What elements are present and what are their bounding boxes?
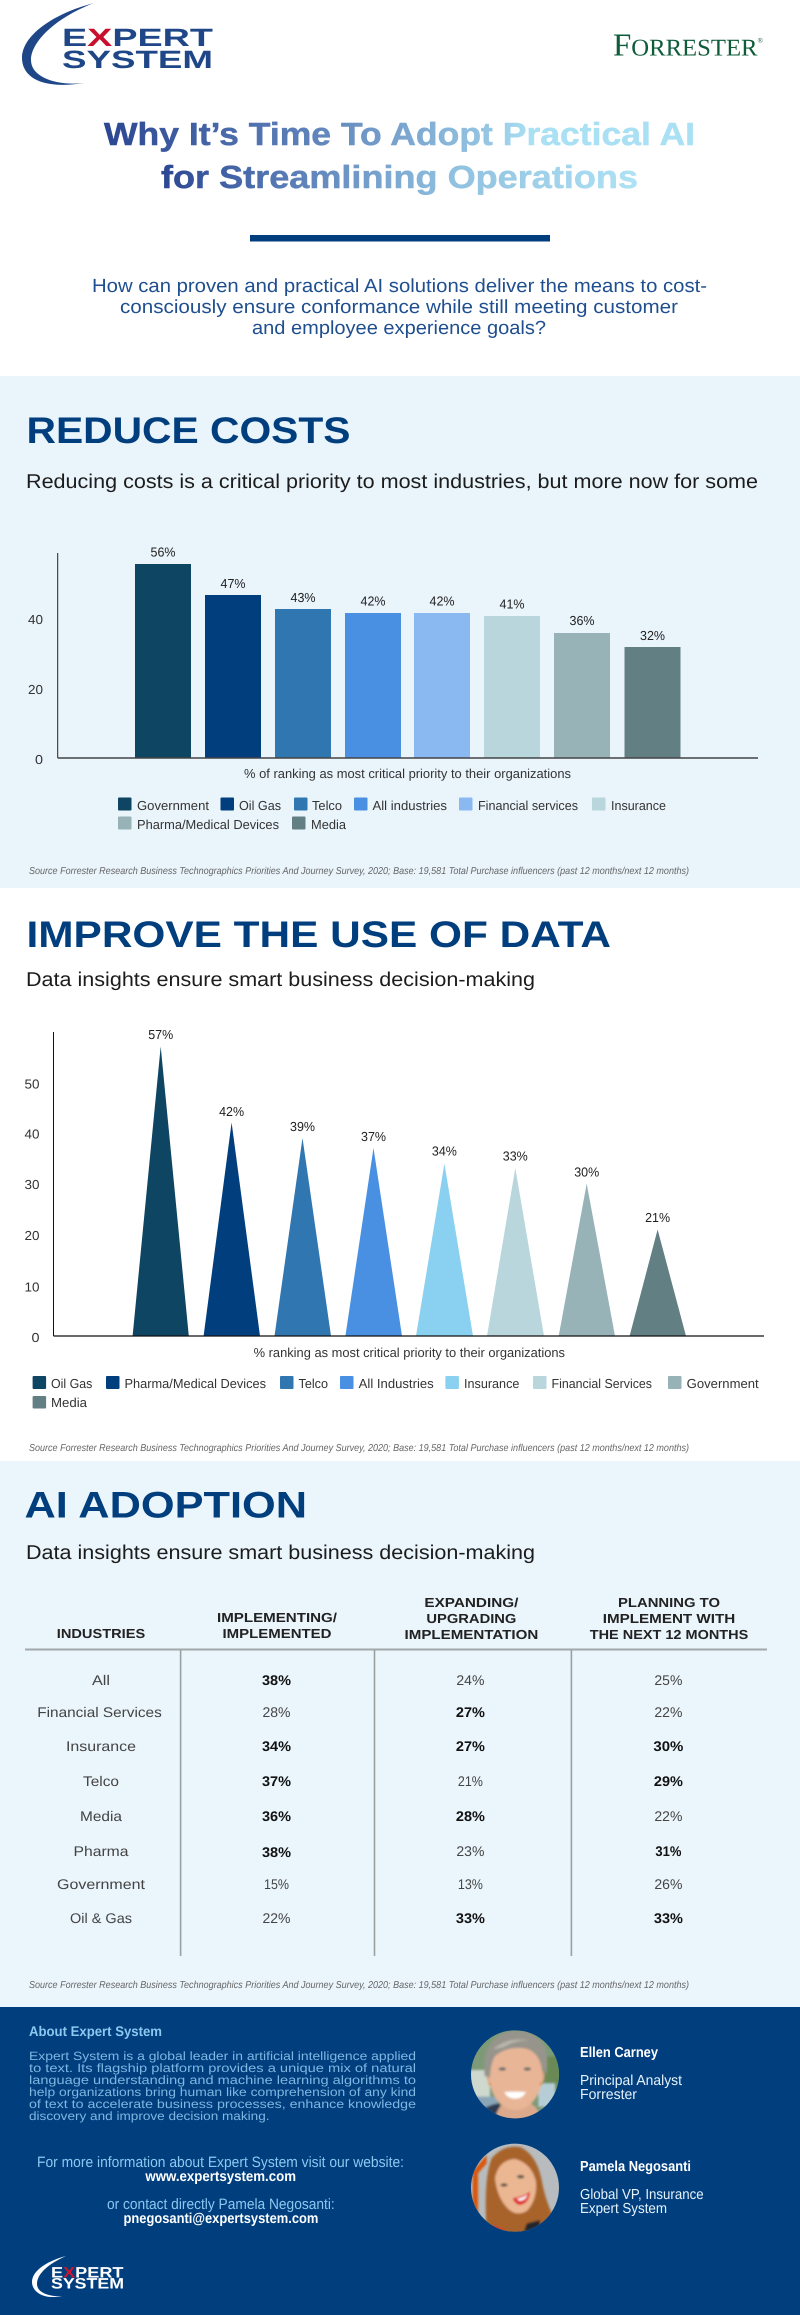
footer logo: Expert System	[32, 2256, 124, 2297]
x axis label: % ranking as most critical priority to their organizations	[254, 1345, 565, 1360]
name: Pamela Negosanti: Global VP, Insurance	[580, 2187, 704, 2203]
source note: Source Forrester Research Business Technographics Priorities And Journey Survey, 2020; Base: 19,581 Total Purchase influencers (past 12 months/next 12 months)	[29, 1980, 689, 1991]
row: Oil & Gas: 33%	[654, 1910, 683, 1926]
about paragraph: of text to accelerate business processes, enhance knowledge	[29, 2097, 416, 2111]
y axis labels: 0	[32, 1330, 40, 1345]
logo: Expert System	[22, 3, 213, 85]
panel background	[0, 1461, 800, 2007]
legend: improve data: All Industries	[359, 1376, 434, 1391]
row: Oil & Gas: 22%	[262, 1910, 290, 1926]
legend: reduce costs: Insurance	[611, 798, 666, 813]
row: Insurance: 27%	[456, 1738, 485, 1754]
row: Insurance: Insurance	[66, 1738, 136, 1754]
name: Pamela Negosanti: Expert System	[580, 2201, 667, 2217]
row: Government: Government	[57, 1876, 145, 1892]
triangle: Government 30%	[559, 1165, 615, 1336]
table header: EXPANDING/	[424, 1595, 519, 1610]
x axis label: % of ranking as most critical priority to their organizations	[244, 766, 571, 781]
legend: improve data: Insurance	[464, 1376, 519, 1391]
panel: improve the use of data	[24, 914, 764, 1454]
triangle: Insurance 34%	[416, 1144, 473, 1336]
footer logo: Expert System: SYSTEM	[51, 2276, 124, 2292]
bar: Financial services 42%	[414, 594, 470, 758]
logo: Expert System: E X PERT	[62, 24, 213, 52]
y axis labels: 40	[28, 612, 43, 627]
footer logo: Expert System: EXPERT	[51, 2264, 124, 2281]
row: Pharma: Pharma	[74, 1843, 129, 1859]
bar: Government 56%: 56%	[150, 544, 176, 560]
table header: UPGRADING	[426, 1611, 516, 1626]
about paragraph	[29, 2049, 416, 2123]
footer background	[0, 2007, 800, 2315]
row: Media: 28%	[456, 1808, 485, 1824]
legend: improve data: Media	[51, 1395, 88, 1410]
y axis labels	[28, 612, 43, 767]
table: ai adoption by industry	[25, 1595, 767, 1956]
row: Media: 22%	[654, 1808, 682, 1824]
bar: All industries 42%	[345, 594, 401, 758]
legend: improve data: Government	[687, 1376, 759, 1391]
bar: Oil Gas 47%: 47%	[220, 576, 246, 591]
row: Pharma: 38%	[262, 1844, 292, 1860]
title rule	[250, 235, 550, 242]
row: Government: 26%	[654, 1876, 682, 1892]
row: All: 25%	[654, 1672, 682, 1688]
intro question: and employee experience goals?	[252, 318, 546, 339]
table header: IMPLEMENTED	[222, 1626, 332, 1641]
intro question: How can proven and practical AI solutions deliver the means to cost-	[92, 276, 707, 297]
bar: Pharma/Medical Devices 36%	[554, 613, 610, 758]
triangle: Media 21%	[630, 1210, 686, 1336]
y axis labels: 0	[35, 752, 43, 767]
row: Telco	[83, 1773, 683, 1789]
row: Pharma: 23%	[456, 1843, 484, 1859]
y axis labels: 20	[24, 1228, 40, 1243]
panel background	[0, 376, 800, 888]
name: Pamela Negosanti	[580, 2159, 704, 2217]
legend: reduce costs: All industries	[372, 798, 447, 813]
table header: IMPLEMENTING/	[217, 1610, 337, 1625]
triangle: All Industries 37%	[345, 1129, 402, 1336]
contact block: or contact directly Pamela Negosanti:	[107, 2196, 335, 2213]
row: Financial Services	[37, 1704, 682, 1720]
triangle chart: improve data	[24, 1027, 764, 1360]
triangle: Insurance 34%: 34%	[432, 1144, 457, 1159]
name: Ellen Carney: Principal Analyst	[580, 2073, 682, 2089]
bar: Telco 43%: 43%	[290, 590, 316, 605]
legend: reduce costs: Pharma/Medical Devices	[137, 817, 279, 832]
title	[104, 116, 695, 195]
heading: improve the use of data: IMPROVE THE USE OF DATA	[26, 914, 611, 955]
bar: Financial services 42%: 42%	[430, 594, 455, 608]
bar chart: reduce costs	[28, 544, 758, 781]
y axis labels	[24, 1076, 40, 1345]
panel: reduce costs	[0, 376, 800, 888]
triangle: Pharma/Medical Devices 42%: 42%	[219, 1104, 245, 1119]
row: Financial Services: 28%	[262, 1704, 290, 1720]
bar: Oil Gas 47%	[205, 576, 261, 758]
y axis labels: 50	[24, 1076, 40, 1092]
bar: Pharma/Medical Devices 36%: 36%	[570, 613, 595, 628]
logo: Forrester: ®	[758, 36, 764, 44]
about paragraph: discovery and improve decision making.	[29, 2109, 270, 2123]
triangle: Telco 39%	[274, 1119, 331, 1336]
bar: Media 32%: 32%	[640, 628, 665, 643]
triangle: All Industries 37%: 37%	[361, 1129, 386, 1144]
row: Media	[80, 1808, 682, 1824]
triangle: Government 30%: 30%	[574, 1165, 600, 1180]
legend: reduce costs: Oil Gas	[239, 798, 281, 813]
panel: ai adoption	[0, 1461, 800, 2007]
table header: PLANNING TO	[618, 1595, 720, 1610]
legend: reduce costs: Telco	[312, 798, 342, 813]
row: Oil & Gas: 33%	[456, 1910, 485, 1926]
row: Media: 36%	[262, 1808, 292, 1824]
row: All: All	[92, 1672, 110, 1688]
about paragraph: to text. Its flagship platform provides a unique mix of natural	[29, 2061, 416, 2075]
row: Media: Media	[80, 1808, 122, 1824]
row: Government: 13%	[458, 1876, 483, 1892]
y axis labels: 40	[24, 1126, 40, 1142]
panel: footer about	[0, 2007, 800, 2315]
row: Telco: 37%	[262, 1773, 292, 1789]
row: Telco: 29%	[654, 1773, 683, 1789]
title: for Streamlining Operations	[161, 159, 638, 195]
legend: improve data: Financial Services	[552, 1376, 652, 1391]
table header: IMPLEMENT WITH	[603, 1611, 735, 1626]
row: Financial Services: 27%	[456, 1704, 485, 1720]
row: Financial Services: Financial Services	[37, 1704, 162, 1720]
bar: Telco 43%	[275, 590, 331, 758]
y axis labels: 10	[24, 1280, 40, 1294]
row: Telco: Telco	[83, 1773, 119, 1789]
row: All: 24%	[456, 1672, 484, 1688]
subheading: Data insights ensure smart business decision-making	[26, 969, 535, 991]
row: Oil & Gas: Oil & Gas	[70, 1910, 132, 1926]
table header: IMPLEMENTATION	[405, 1627, 538, 1642]
header	[22, 3, 764, 339]
legend: improve data: Pharma/Medical Devices	[124, 1376, 266, 1391]
triangle: Financial Services 33%	[487, 1149, 544, 1336]
row: Government	[57, 1876, 682, 1892]
row: Insurance: 30%	[653, 1738, 684, 1754]
name: Ellen Carney	[580, 2045, 682, 2103]
triangle: Oil Gas 57%: 57%	[148, 1027, 174, 1042]
source note: Source Forrester Research Business Technographics Priorities And Journey Survey, 2020; Base: 19,581 Total Purchase influencers (past 12 months/next 12 months)	[29, 1443, 689, 1454]
legend: improve data: Telco	[298, 1376, 328, 1391]
triangle: Media 21%: 21%	[645, 1210, 671, 1225]
contact block: www.expertsystem.com	[144, 2169, 296, 2185]
row: Oil & Gas	[70, 1910, 683, 1926]
about heading: About Expert System	[29, 2023, 162, 2039]
table header	[57, 1595, 749, 1642]
contact block: For more information about Expert System visit our website:	[37, 2154, 404, 2171]
triangle: Financial Services 33%: 33%	[503, 1149, 528, 1164]
bar: Insurance 41%: 41%	[500, 596, 525, 612]
legend: improve data	[33, 1376, 759, 1410]
heading: ai adoption: AI ADOPTION	[24, 1484, 307, 1526]
legend: improve data: Oil Gas	[51, 1376, 93, 1391]
bar: Insurance 41%	[484, 596, 540, 758]
portrait: Pamela Negosanti	[471, 2144, 559, 2232]
bar: All industries 42%: 42%	[360, 594, 386, 608]
y axis labels: 30	[24, 1177, 40, 1192]
subheading: Reducing costs is a critical priority to most industries, but more now for some	[26, 471, 758, 493]
intro question: consciously ensure conformance while still meeting customer	[120, 297, 679, 318]
row: All	[92, 1672, 682, 1688]
contact block: pnegosanti@expertsystem.com	[124, 2211, 318, 2227]
legend: reduce costs: Media	[311, 817, 347, 832]
logo: Forrester: FORRESTER	[613, 26, 754, 62]
row: Insurance	[66, 1738, 684, 1754]
legend: reduce costs: Government	[137, 798, 209, 813]
row: Government: 15%	[264, 1876, 289, 1892]
bar: Government 56%	[135, 544, 191, 758]
triangle: Telco 39%: 39%	[290, 1119, 315, 1134]
y axis labels: 20	[28, 682, 43, 697]
about paragraph: language understanding and machine learning algorithms to	[29, 2073, 416, 2087]
logo: Expert System: SYSTEM	[62, 46, 213, 74]
portrait: Ellen Carney	[471, 2030, 559, 2118]
about paragraph: Expert System is a global leader in artificial intelligence applied	[29, 2049, 416, 2063]
name: Ellen Carney: Forrester	[580, 2087, 637, 2103]
source note: Source Forrester Research Business Technographics Priorities And Journey Survey, 2020; Base: 19,581 Total Purchase influencers (past 12 months/next 12 months)	[29, 866, 689, 877]
contact block	[37, 2154, 404, 2227]
row: All: 38%	[262, 1672, 292, 1688]
row: Insurance: 34%	[262, 1738, 292, 1754]
title: Why It’s Time To Adopt Practical AI	[104, 116, 695, 152]
intro question	[92, 276, 707, 339]
about paragraph: help organizations bring human like comprehension of any kind	[29, 2085, 416, 2099]
table header: INDUSTRIES	[57, 1626, 146, 1641]
name: Ellen Carney: Ellen Carney	[580, 2045, 658, 2061]
row: Telco: 21%	[458, 1773, 483, 1789]
legend: reduce costs: Financial services	[478, 798, 578, 813]
bar: Media 32%	[624, 628, 680, 758]
row: Pharma: 31%	[655, 1843, 682, 1859]
subheading: Data insights ensure smart business decision-making	[26, 1542, 535, 1564]
row: Financial Services: 22%	[654, 1704, 682, 1720]
name: Pamela Negosanti: Pamela Negosanti	[580, 2159, 691, 2175]
triangle: Oil Gas 57%	[133, 1027, 189, 1336]
row: Pharma	[74, 1843, 682, 1860]
triangle: Pharma/Medical Devices 42%	[204, 1104, 260, 1336]
table header: THE NEXT 12 MONTHS	[590, 1627, 749, 1642]
legend: reduce costs	[118, 798, 666, 832]
heading: reduce costs: REDUCE COSTS	[26, 410, 350, 451]
